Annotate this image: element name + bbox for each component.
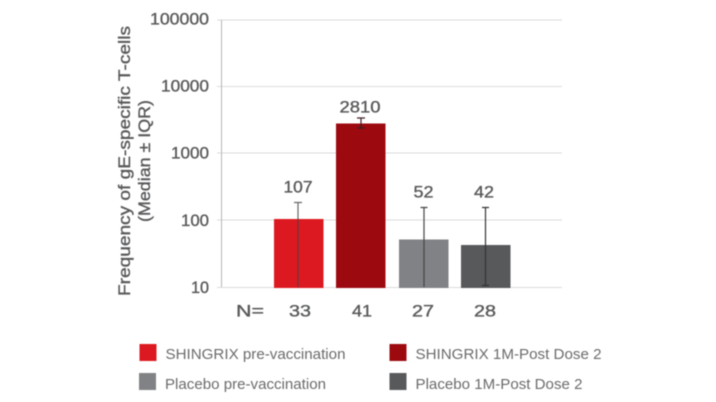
sample size row	[236, 302, 496, 320]
y-axis tick labels	[150, 10, 209, 297]
sample size row: N=	[236, 302, 264, 320]
bar: Placebo pre-vaccination, 52	[399, 184, 448, 288]
y-axis title	[116, 26, 154, 296]
y-axis title: Frequency of gE-specific T-cells	[116, 26, 134, 296]
y-axis tick labels: 100000	[150, 10, 209, 28]
bar: Placebo 1M-Post Dose 2, 42	[461, 184, 510, 288]
legend	[139, 344, 602, 393]
legend: Placebo 1M-Post Dose 2: Placebo 1M-Post Dose 2	[416, 376, 582, 393]
legend: SHINGRIX 1M-Post Dose 2: SHINGRIX 1M-Post Dose 2	[416, 346, 602, 363]
legend: Placebo pre-vaccination: Placebo pre-vaccination	[165, 376, 326, 393]
sample size row: 41	[352, 302, 372, 320]
y-axis tick labels: 10000	[161, 78, 209, 96]
y-axis tick labels: 10	[191, 279, 209, 297]
bar: SHINGRIX pre-vaccination, 107: 107	[284, 178, 312, 196]
sample size row: 27	[412, 302, 434, 320]
y-axis title: (Median ± IQR)	[136, 100, 154, 222]
sample size row: 28	[474, 302, 496, 320]
bar: Placebo 1M-Post Dose 2, 42: 42	[474, 184, 494, 202]
y-axis tick labels: 100	[181, 212, 209, 230]
sample size row: 33	[289, 302, 311, 320]
y-axis tick labels: 1000	[171, 144, 209, 162]
legend: SHINGRIX pre-vaccination: SHINGRIX pre-vaccination	[166, 346, 346, 363]
chart gridlines and axis	[217, 20, 562, 288]
bar: SHINGRIX 1M-Post Dose 2, 2810: 2810	[340, 98, 380, 116]
bar: SHINGRIX 1M-Post Dose 2, 2810	[336, 98, 386, 288]
bar: Placebo pre-vaccination, 52: 52	[414, 184, 434, 202]
bar: SHINGRIX pre-vaccination, 107	[274, 178, 324, 288]
